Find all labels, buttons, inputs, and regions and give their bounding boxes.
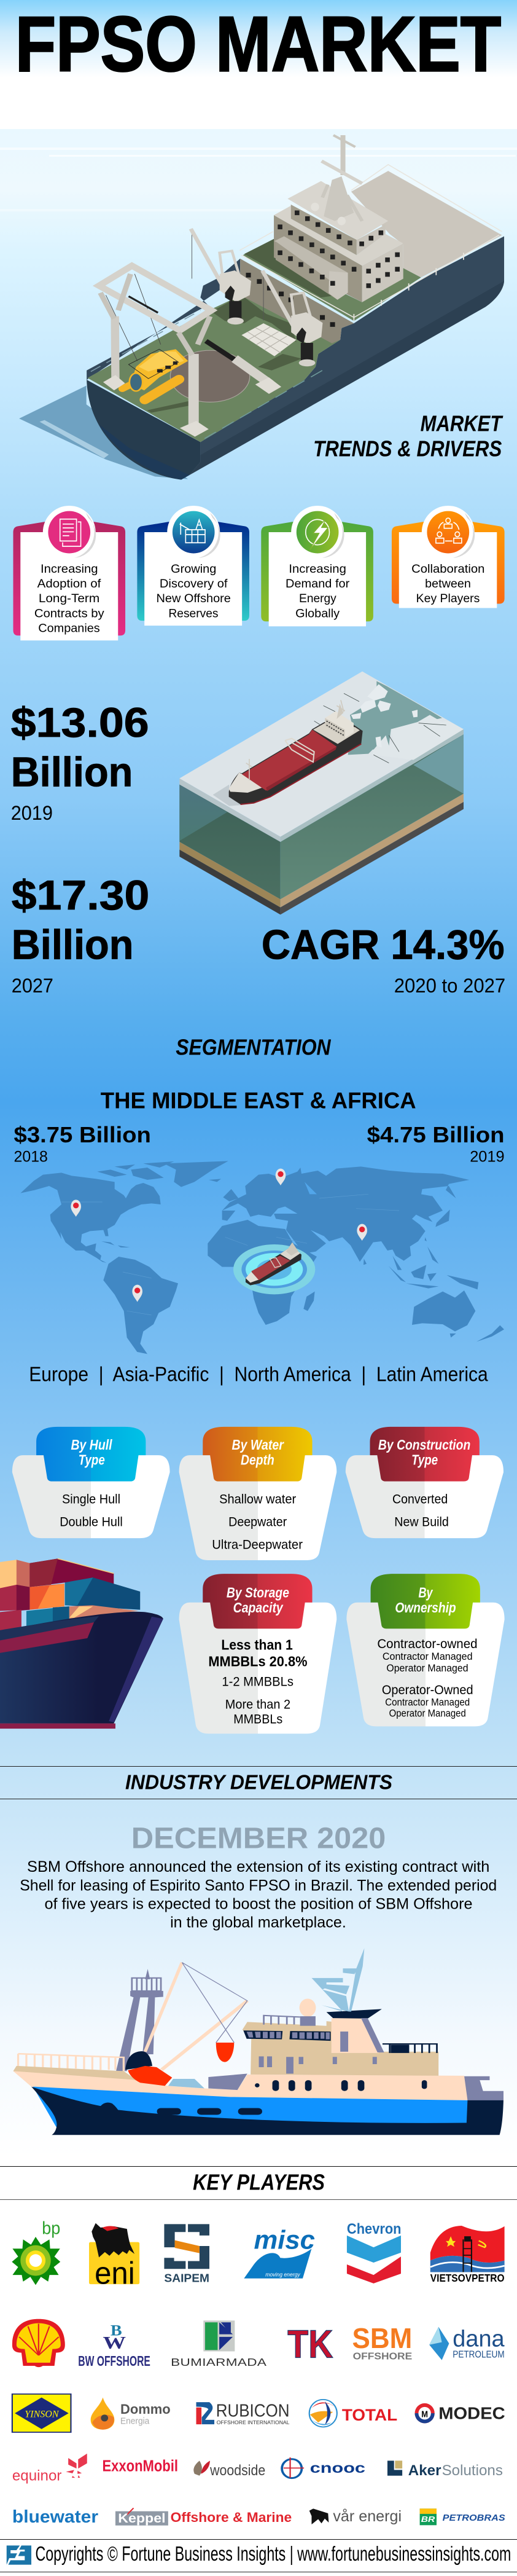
logo: rubicon xyxy=(196,2400,290,2426)
card: by hull type: Type xyxy=(79,1453,105,1468)
icon: people cycle xyxy=(427,511,469,553)
card: by ownership: By xyxy=(418,1585,433,1601)
logo: dana petroleum xyxy=(429,2326,505,2360)
section: trends cards and market size xyxy=(11,506,505,997)
section: segmentation and map text xyxy=(14,1035,505,1386)
stat: 2019 market size: Billion xyxy=(11,748,133,795)
icon: shadow strip xyxy=(39,420,109,458)
card: by storage capacity: Capacity xyxy=(233,1600,284,1616)
card: by storage capacity: 1-2 MMBBLs xyxy=(222,1674,293,1689)
card: offshore reserves xyxy=(137,506,249,626)
card: by water depth: By Water xyxy=(232,1437,284,1453)
card: by construction type xyxy=(346,1427,503,1538)
card: by water depth: Depth xyxy=(241,1453,274,1468)
section: key players xyxy=(7,2170,511,2566)
stat: 2019 market size: 2019 xyxy=(11,802,53,824)
card: by construction type: New Build xyxy=(394,1514,449,1529)
card: offshore reserves: New Offshore xyxy=(157,592,231,605)
logo: rubicon: RUBICON xyxy=(216,2400,289,2420)
card: by storage capacity: MMBBLs xyxy=(233,1711,282,1726)
logo: total xyxy=(309,2400,397,2427)
logo: var energi xyxy=(309,2507,402,2524)
logo: bumi armada: BUMIARMADA xyxy=(171,2357,266,2368)
card: long-term contracts xyxy=(13,506,125,640)
logo: modec: MODEC xyxy=(438,2404,505,2423)
logo: yinson: YINSON xyxy=(25,2408,60,2419)
logo: bw offshore: W xyxy=(103,2333,126,2352)
icon: ship on ripple highlight xyxy=(233,1243,315,1294)
card: by storage capacity: More than 2 xyxy=(225,1697,290,1711)
logo: keppel offshore and marine: Keppel xyxy=(118,2511,166,2526)
logo: sbm offshore: OFFSHORE xyxy=(353,2351,412,2362)
logo: aker solutions xyxy=(387,2460,503,2478)
heading: industry developments: INDUSTRY DEVELOPMENTS xyxy=(125,1771,392,1794)
icon: map pin Europe xyxy=(276,1169,286,1185)
stat: 2019 market size: $13.06 xyxy=(11,699,149,745)
logo: aker solutions: Solutions xyxy=(442,2462,503,2478)
chart: world map xyxy=(20,1161,504,1354)
logo: keppel offshore and marine: Offshore & Marine xyxy=(171,2510,292,2525)
card: by ownership: Operator Managed xyxy=(386,1663,468,1674)
logo: equinor xyxy=(12,2454,87,2484)
logo: saipem xyxy=(164,2224,209,2285)
logo: rubicon: OFFSHORE INTERNATIONAL xyxy=(217,2420,290,2426)
logo: sbm offshore xyxy=(352,2323,412,2362)
logo: misc: misc xyxy=(254,2225,315,2255)
card: by storage capacity xyxy=(179,1574,336,1734)
logo: bw offshore: B xyxy=(111,2322,122,2339)
logo: dommo: Energia xyxy=(120,2416,150,2426)
logo: modec xyxy=(415,2403,505,2423)
logo: sbm offshore: SBM xyxy=(352,2323,412,2354)
card: collaboration: Collaboration xyxy=(411,562,484,576)
logo: petrobras xyxy=(420,2508,505,2525)
card: by hull type: Single Hull xyxy=(62,1491,120,1506)
card: by ownership: Operator Managed xyxy=(389,1708,466,1719)
card: by water depth: Ultra-Deepwater xyxy=(212,1537,303,1552)
logo: shell xyxy=(12,2319,65,2367)
logo: woodside: woodside xyxy=(209,2462,265,2478)
stat: CAGR: 2020 to 2027 xyxy=(394,975,505,997)
stat: 2019 market size xyxy=(11,699,149,824)
card: by construction type: Converted xyxy=(392,1491,448,1506)
card: collaboration: Key Players xyxy=(416,592,480,605)
logo: chevron: Chevron xyxy=(347,2220,402,2237)
card: energy demand: Globally xyxy=(295,607,340,621)
heading: market trends and drivers: MARKET xyxy=(421,411,503,436)
card: long-term contracts: Adoption of xyxy=(37,578,101,591)
logo: dana petroleum: dana xyxy=(453,2326,505,2352)
heading: market trends and drivers xyxy=(313,411,503,461)
icon: map pin North America xyxy=(71,1200,81,1217)
card: long-term contracts: Increasing xyxy=(41,562,98,576)
section: segment cards xyxy=(0,1427,505,1734)
stat: 2027 market size: 2027 xyxy=(12,975,53,997)
card: long-term contracts: Companies xyxy=(38,622,100,635)
stat: 2018 value: $3.75 Billion xyxy=(14,1123,151,1147)
logo: bp: bp xyxy=(42,2218,60,2238)
logo: misc xyxy=(244,2225,315,2279)
section: industry developments xyxy=(13,1771,503,2135)
icon: oil rig xyxy=(173,511,215,553)
logo: equinor: equinor xyxy=(12,2467,61,2484)
logo: woodside xyxy=(193,2460,265,2478)
logo: var energi: vår energi xyxy=(333,2507,402,2524)
logo: total: TOTAL xyxy=(342,2406,397,2424)
logo: cnooc: cnooc xyxy=(310,2460,365,2476)
heading: segmentation: SEGMENTATION xyxy=(176,1035,332,1060)
icon: fortune business insights logo xyxy=(7,2545,31,2565)
logo: yinson xyxy=(12,2394,71,2432)
logo: bw offshore: BW OFFSHORE xyxy=(78,2353,150,2369)
stat: 2019 value xyxy=(367,1123,505,1165)
logo: misc: moving energy xyxy=(265,2271,300,2278)
icon: document xyxy=(48,511,90,553)
illustration: icebreaker ship on ice block xyxy=(179,672,464,914)
text: development description: in the global marketplace. xyxy=(170,1914,346,1931)
icon: map pin Asia xyxy=(357,1224,367,1241)
logo: bw offshore xyxy=(78,2322,150,2369)
stat: 2027 market size: $17.30 xyxy=(12,872,149,919)
logo: bp xyxy=(12,2218,60,2285)
card: by ownership: Ownership xyxy=(395,1600,456,1616)
heading: key players: KEY PLAYERS xyxy=(193,2170,325,2195)
card: energy demand: Increasing xyxy=(289,562,346,576)
heading: december 2020: DECEMBER 2020 xyxy=(131,1821,386,1855)
stat: 2019 value: 2019 xyxy=(470,1149,505,1165)
card: collaboration: between xyxy=(425,578,471,591)
logo: chevron xyxy=(347,2220,402,2283)
card: by hull type: By Hull xyxy=(71,1437,112,1453)
logo: cnooc xyxy=(282,2457,365,2478)
card: energy demand xyxy=(261,506,373,626)
logo: eni xyxy=(89,2223,139,2291)
card: by water depth xyxy=(179,1427,336,1560)
illustration: container ship bow xyxy=(0,1558,163,1729)
card: offshore reserves: Growing xyxy=(171,562,216,576)
card: by hull type xyxy=(12,1427,170,1538)
illustration: offshore vessel xyxy=(13,1948,503,2135)
stat: CAGR: CAGR 14.3% xyxy=(262,922,505,968)
card: by ownership: Contractor Managed xyxy=(383,1651,473,1662)
card: offshore reserves: Discovery of xyxy=(160,578,228,591)
logo: bluewater: bluewater xyxy=(12,2507,98,2526)
card: offshore reserves: Reserves xyxy=(168,607,218,621)
card: by water depth: Shallow water xyxy=(219,1491,296,1506)
stat: 2027 market size: Billion xyxy=(12,922,133,968)
logo: vietsovpetro xyxy=(430,2226,505,2284)
logo: saipem: SAIPEM xyxy=(164,2272,209,2285)
card: by ownership xyxy=(346,1574,505,1726)
illustration: FPSO ship shadow xyxy=(19,386,188,479)
card: by hull type: Double Hull xyxy=(60,1514,123,1529)
logo: petrobras: PETROBRAS xyxy=(443,2513,505,2523)
logo: tk: TK xyxy=(287,2322,333,2366)
logo: dommo: Dommo xyxy=(120,2402,171,2417)
section: header xyxy=(15,0,503,461)
card: by storage capacity: MMBBLs 20.8% xyxy=(208,1654,307,1670)
logo: bumi armada xyxy=(171,2320,266,2368)
card: energy demand: Demand for xyxy=(286,578,349,591)
logo: aker solutions: Aker xyxy=(408,2462,441,2478)
logo: dommo xyxy=(91,2397,171,2430)
stat: 2018 value xyxy=(14,1123,151,1165)
stat: 2018 value: 2018 xyxy=(14,1149,48,1165)
icon: lightning bolt xyxy=(297,511,338,553)
card: by water depth: Deepwater xyxy=(228,1514,287,1529)
text: development description xyxy=(20,1858,497,1931)
stat: CAGR xyxy=(262,922,505,997)
card: by storage capacity: By Storage xyxy=(227,1585,289,1601)
card: collaboration xyxy=(392,506,505,608)
icon: map pin Latin America xyxy=(132,1285,142,1302)
logo: keppel offshore and marine xyxy=(115,2508,292,2526)
card: by construction type: Type xyxy=(411,1453,438,1468)
stat: 2027 market size xyxy=(12,872,149,997)
card: long-term contracts: Contracts by xyxy=(34,607,104,621)
card: long-term contracts: Long-Term xyxy=(39,592,99,605)
card: by storage capacity: Less than 1 xyxy=(221,1637,293,1653)
illustration: FPSO ship xyxy=(70,135,504,480)
card: energy demand: Energy xyxy=(299,592,336,605)
logo: petrobras: BR xyxy=(421,2515,435,2524)
logo: exxonmobil: ExxonMobil xyxy=(102,2457,178,2475)
logo: modec: M xyxy=(421,2409,428,2419)
logo: eni: eni xyxy=(95,2255,135,2291)
panel: trend cards xyxy=(13,506,505,640)
